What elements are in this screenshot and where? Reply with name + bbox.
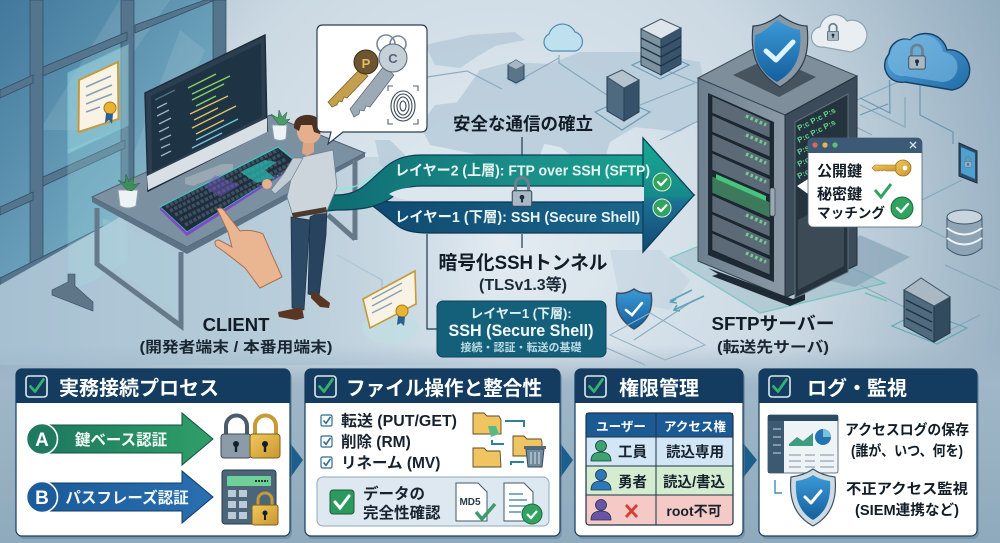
label: client subtitle: (開発者端末 / 本番用端末)	[140, 338, 332, 356]
heading: 権限管理	[619, 377, 699, 400]
heading: encrypted SSH tunnel: 暗号化SSHトンネル	[438, 252, 608, 274]
icon: blue cloud	[885, 33, 970, 90]
icon: database	[947, 210, 982, 256]
icon: certificate on glass	[78, 62, 118, 132]
icon: header check	[315, 376, 336, 397]
icon: gold key	[872, 160, 911, 176]
heading: 実務接続プロセス	[59, 377, 219, 400]
icon: server shield	[752, 15, 808, 87]
icon: match check	[891, 197, 913, 219]
panel: connection process	[16, 369, 292, 539]
icon: gray cloud	[811, 15, 867, 52]
icon: green tick	[875, 184, 891, 197]
keyboard	[160, 147, 298, 236]
callout: layer 1 box: SSH (Secure Shell)	[448, 321, 594, 340]
icon: header check	[769, 376, 790, 397]
icon: integrity check	[330, 490, 354, 514]
server rack	[698, 40, 857, 306]
callout: layer 1 box: 接続・認証・転送の基礎	[460, 340, 582, 354]
text: intrusion monitoring	[846, 481, 969, 519]
callout: key matching window	[797, 138, 922, 227]
label: client: CLIENT	[203, 314, 270, 335]
icon: lower certificate	[362, 271, 418, 344]
icon: keypad with lock	[222, 470, 278, 525]
desk	[92, 115, 365, 326]
checklist: 転送 (PUT/GET)	[341, 412, 457, 430]
floor diamond near shield	[610, 313, 705, 360]
rack status readouts: P:c	[796, 167, 811, 181]
icon: background rack stack	[632, 19, 689, 79]
icon: background tower server	[595, 70, 650, 130]
callout: data integrity: 完全性確認	[363, 503, 441, 522]
rack status readouts: P:c P:c P:s	[796, 118, 838, 145]
text: intrusion monitoring: 不正アクセス監視	[846, 481, 969, 498]
row: hero: 勇者	[618, 474, 647, 491]
bottom strip	[0, 345, 1000, 543]
connector chevrons	[290, 443, 757, 478]
arrow head	[643, 138, 694, 252]
icon: phone	[959, 143, 977, 183]
floor	[0, 157, 500, 365]
text: access log: アクセスログの保存	[845, 421, 969, 439]
icon: background cloud	[544, 24, 582, 51]
monitor	[145, 35, 267, 191]
callout: data integrity	[317, 477, 549, 526]
rack status readouts: P:c P:c P:s	[796, 106, 838, 133]
label: server subtitle: (転送先サーバ)	[717, 338, 829, 356]
panel: logs and monitoring	[759, 369, 979, 539]
heading: ファイル操作と整合性	[346, 377, 542, 400]
rack status readouts	[796, 106, 838, 181]
icon: background small server	[505, 60, 527, 86]
floor platform under rack	[670, 223, 885, 313]
icon: MD5 document	[456, 483, 495, 521]
icon: MD5 document: MD5	[459, 497, 481, 508]
icon: layer 2 check	[653, 173, 671, 191]
permissions table: アクセス権	[664, 419, 726, 434]
arrow: key auth	[26, 413, 213, 465]
subheading: TLS: (TLSv1.3等)	[479, 275, 567, 294]
text: access log	[845, 421, 969, 460]
checklist	[321, 412, 457, 472]
upper band	[327, 138, 694, 211]
cloud uplink arrows	[860, 80, 953, 144]
arrow: passphrase auth	[26, 471, 213, 523]
rack status readouts: P:s P:c	[796, 136, 825, 157]
icon: header check	[26, 376, 47, 397]
row: worker: 読込専用	[666, 443, 724, 461]
label: matching: マッチング	[817, 205, 885, 221]
label: データの	[363, 484, 425, 503]
icon: tunnel lock	[512, 178, 532, 206]
icon: dashboard	[768, 415, 838, 473]
permissions table: ユーザー	[596, 420, 646, 434]
icon: layer 1 check	[653, 199, 671, 217]
icon: fingerprint	[388, 86, 418, 124]
row: denied	[591, 500, 722, 520]
text: access log: (誰が、いつ、何を)	[851, 442, 963, 460]
icon: gray padlock	[221, 416, 251, 458]
heading: ログ・監視	[807, 376, 907, 400]
arrow: key auth: A	[35, 430, 49, 451]
row: worker: 工員	[618, 444, 647, 461]
layer 1 label: レイヤー1 (下層): SSH (Secure Shell)	[395, 209, 640, 226]
window	[0, 0, 226, 290]
encrypted tunnel arrow	[327, 138, 694, 252]
panel: file operations and integrity	[305, 369, 562, 539]
icon: pointing hand	[215, 208, 282, 288]
network lines	[337, 55, 1000, 365]
arrow: key auth: 鍵ベース認証	[75, 431, 168, 449]
icon: small server	[892, 278, 967, 344]
panel: permissions	[575, 369, 745, 539]
person	[262, 115, 337, 320]
data flow arrows	[670, 290, 704, 311]
glass certificate panel	[52, 45, 128, 311]
icon: gold padlock	[250, 416, 280, 458]
row: hero: 読込/書込	[663, 473, 726, 491]
label: public key: 公開鍵	[817, 162, 862, 180]
arrow: passphrase auth: パスフレーズ認証	[65, 488, 189, 507]
row: denied: root不可	[666, 503, 722, 519]
layer 2 label: レイヤー2 (上層): FTP over SSH (SFTP)	[395, 162, 650, 180]
icon: verified document	[504, 483, 542, 524]
checklist: リネーム (MV)	[341, 454, 440, 472]
arrow: passphrase auth: B	[35, 488, 49, 509]
connector lines	[427, 137, 522, 329]
callout: layer 1 box	[437, 301, 606, 357]
icon: folders and trash	[473, 413, 546, 467]
text: intrusion monitoring: (SIEM連携など)	[855, 501, 959, 519]
icon: gold key: P	[362, 56, 371, 71]
rack status readouts: P:c	[796, 155, 811, 169]
callout: keys and fingerprint	[317, 25, 427, 144]
label: SFTP server: SFTPサーバー	[712, 314, 834, 334]
plants	[118, 110, 290, 208]
world map backdrop	[375, 32, 710, 310]
row: worker	[591, 440, 724, 461]
label: private key: 秘密鍵	[817, 185, 862, 203]
icon: small shield	[616, 289, 652, 329]
checklist: 削除 (RM)	[341, 433, 411, 451]
icon: header check	[585, 376, 606, 397]
permissions table	[586, 413, 733, 525]
callout: layer 1 box: レイヤー1 (下層):	[470, 306, 572, 321]
lower band	[360, 195, 694, 252]
icon: silver key: C	[388, 51, 398, 66]
heading: secure communication: 安全な通信の確立	[453, 114, 593, 134]
row: hero	[591, 470, 726, 491]
icon: monitoring shield	[775, 469, 835, 526]
